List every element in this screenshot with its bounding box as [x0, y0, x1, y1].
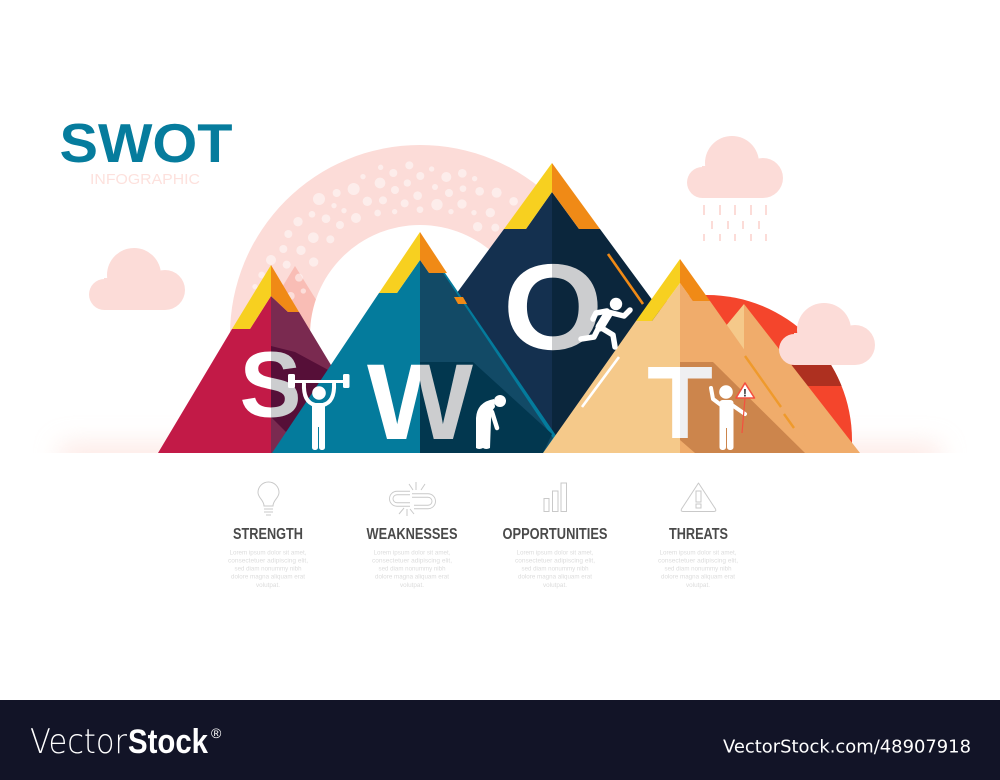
pink arch with dots	[230, 145, 610, 445]
text: opportunities	[515, 550, 595, 589]
text: opportunities: sed diam nonummy nibh	[522, 566, 589, 572]
text: threats: Lorem ipsum dolor sit amet,	[660, 550, 737, 556]
heading: strength: STRENGTH	[233, 526, 303, 543]
icon: warning triangle	[681, 483, 716, 512]
figure: runner	[581, 298, 630, 347]
icon: light bulb	[258, 482, 279, 515]
figure: person with warning sign	[711, 383, 754, 450]
heading: weaknesses: WEAKNESSES	[366, 526, 458, 543]
text: threats: sed diam nonummy nibh	[664, 566, 732, 572]
text: threats: dolore magna aliquam erat	[661, 574, 735, 580]
footer url: VectorStock.com/48907918	[723, 738, 971, 758]
footer bar	[0, 700, 1000, 780]
text: threats: consectetuer adipiscing elit,	[658, 558, 738, 564]
orange streaks over T	[745, 356, 794, 428]
text: threats	[658, 550, 738, 589]
letter O: O	[503, 239, 603, 375]
mountain T front	[543, 259, 817, 453]
text: weaknesses: Lorem ipsum dolor sit amet,	[374, 550, 451, 556]
icon: bars	[544, 483, 566, 512]
figure: bowed person	[476, 395, 506, 449]
text: weaknesses	[372, 550, 452, 589]
text: weaknesses: volutpat.	[400, 582, 424, 589]
white streak	[582, 357, 619, 407]
letter T: T	[647, 345, 713, 460]
arch dots	[252, 161, 518, 300]
letter W: W	[367, 341, 473, 462]
text: weaknesses: consectetuer adipiscing elit,	[372, 558, 452, 564]
warning sign	[742, 398, 745, 433]
rain	[704, 205, 766, 241]
text: weaknesses: dolore magna aliquam erat	[375, 574, 449, 580]
heading: opportunities: OPPORTUNITIES	[502, 526, 608, 543]
text: opportunities: volutpat.	[543, 582, 567, 589]
text: opportunities: dolore magna aliquam erat	[518, 574, 592, 580]
cloud right	[779, 303, 875, 365]
text: strength	[228, 550, 308, 589]
mountain W	[272, 232, 568, 453]
text: strength: Lorem ipsum dolor sit amet,	[230, 550, 307, 556]
subtitle: INFOGRAPHIC	[90, 171, 200, 188]
mountain T back	[725, 304, 860, 453]
text: strength: consectetuer adipiscing elit,	[228, 558, 308, 564]
cloud left	[89, 248, 185, 310]
text: opportunities: consectetuer adipiscing elit,	[515, 558, 595, 564]
mountain S	[158, 265, 384, 453]
floor glow	[58, 438, 942, 453]
footer logo: Stock	[128, 723, 208, 761]
orange chip	[454, 297, 467, 304]
orange streak	[608, 254, 643, 304]
mountain O	[339, 163, 765, 453]
text: opportunities: Lorem ipsum dolor sit amet,	[516, 550, 594, 556]
text: strength: sed diam nonummy nibh	[234, 566, 302, 572]
title: SWOT	[60, 112, 232, 174]
figure: weightlifter	[288, 374, 350, 450]
text: strength: dolore magna aliquam erat	[231, 574, 305, 580]
figure: person with warning sign: !	[743, 388, 747, 400]
heading: threats: THREATS	[669, 526, 728, 543]
footer logo: Vector	[30, 722, 127, 762]
footer logo	[30, 722, 222, 762]
text: weaknesses: sed diam nonummy nibh	[378, 566, 446, 572]
small mountain behind S	[262, 266, 330, 335]
text: threats: volutpat.	[686, 582, 710, 589]
footer logo: ®	[211, 725, 222, 741]
letter S: S	[239, 332, 302, 436]
icon: broken chain	[391, 482, 434, 516]
sun	[660, 295, 852, 443]
cloud top right	[687, 136, 783, 198]
text: strength: volutpat.	[256, 582, 280, 589]
orange streaks	[745, 356, 794, 428]
